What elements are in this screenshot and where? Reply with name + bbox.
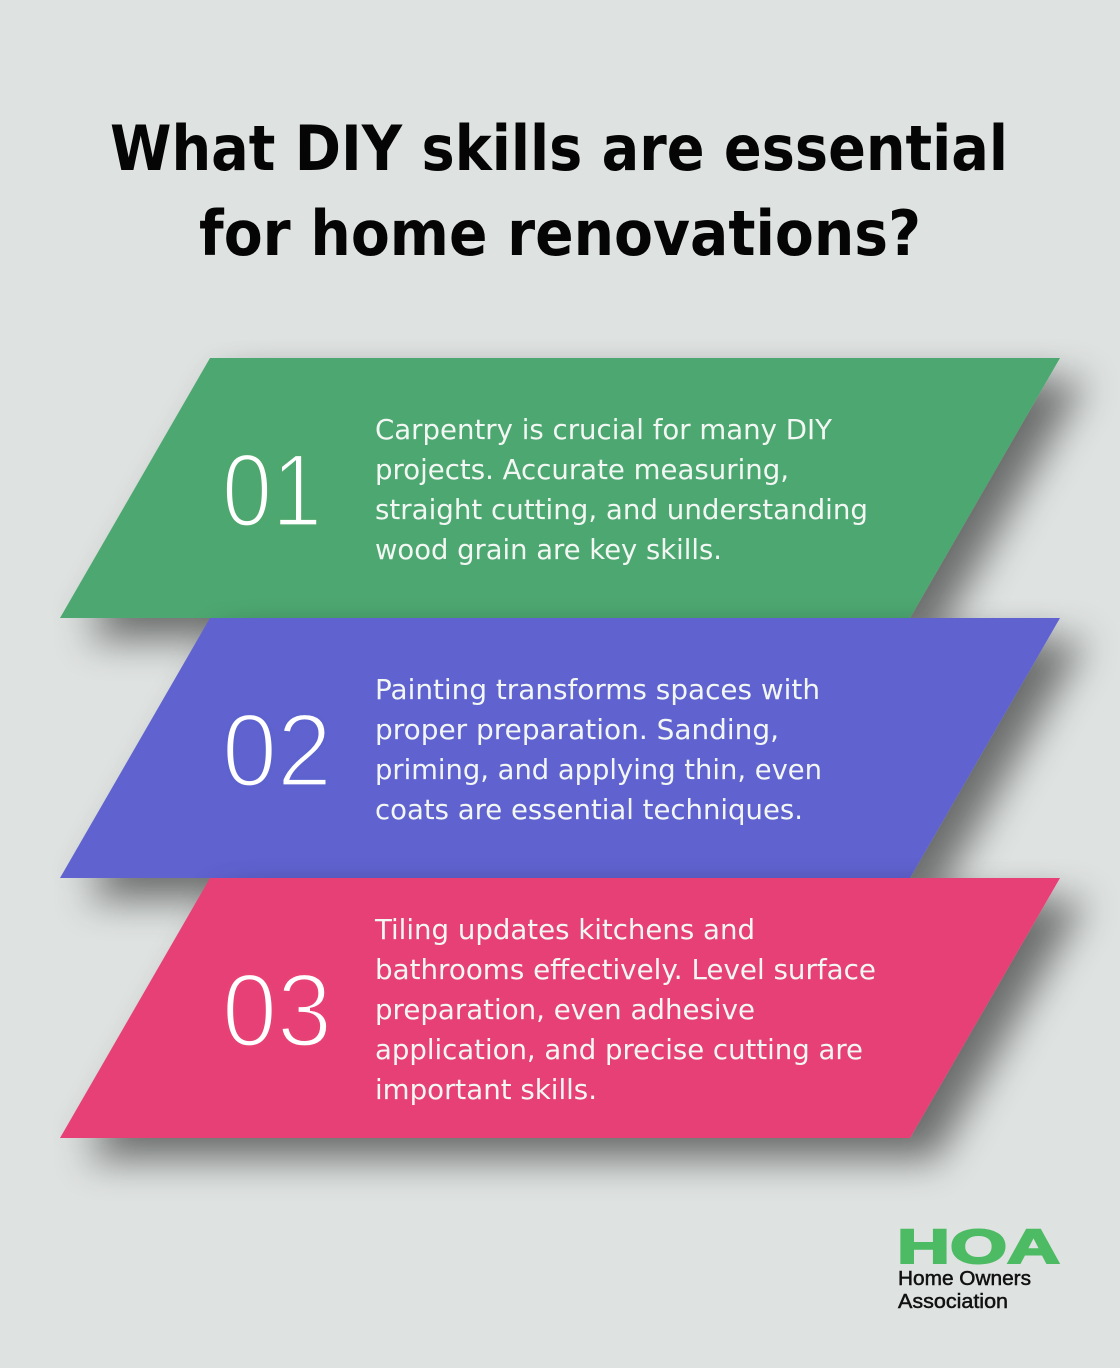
text: tiling description bbox=[374, 914, 876, 1106]
text: carpentry description: wood grain are key skills. bbox=[375, 534, 722, 566]
text: carpentry description bbox=[375, 414, 868, 566]
text: painting description bbox=[375, 674, 822, 826]
text: tiling description: Tiling updates kitchens and bbox=[374, 914, 755, 946]
text: carpentry description: straight cutting, and understanding bbox=[375, 494, 868, 526]
title: for home renovations? bbox=[199, 197, 921, 270]
text: tiling description: preparation, even adhesive bbox=[375, 994, 755, 1026]
title: What DIY skills are essential bbox=[110, 112, 1008, 185]
text: painting description: Painting transforms spaces with bbox=[375, 674, 820, 706]
title bbox=[110, 112, 1008, 270]
panel: step 01 carpentry bbox=[60, 358, 1060, 618]
number 01: 01 bbox=[222, 433, 322, 549]
green parallelogram bbox=[60, 358, 1060, 618]
text: carpentry description: Carpentry is crucial for many DIY bbox=[375, 414, 832, 446]
number 02: 02 bbox=[222, 693, 332, 809]
text: tiling description: application, and precise cutting are bbox=[375, 1034, 863, 1066]
pink parallelogram bbox=[60, 878, 1060, 1138]
text: tiling description: bathrooms effectively. Level surface bbox=[375, 954, 876, 986]
blue parallelogram bbox=[60, 618, 1060, 878]
logo wordmark: Home Owners bbox=[898, 1268, 1031, 1290]
panel: step 03 tiling bbox=[60, 878, 1060, 1138]
text: painting description: coats are essential techniques. bbox=[375, 794, 803, 826]
text: carpentry description: projects. Accurate measuring, bbox=[375, 454, 789, 486]
logo wordmark: Association bbox=[898, 1291, 1008, 1313]
panel: step 02 painting bbox=[60, 618, 1060, 878]
text: painting description: proper preparation. Sanding, bbox=[375, 714, 779, 746]
logo wordmark bbox=[898, 1268, 1031, 1313]
text: painting description: priming, and applying thin, even bbox=[375, 754, 822, 786]
text: tiling description: important skills. bbox=[375, 1074, 597, 1106]
logo mark: HOA letters: HOA bbox=[897, 1221, 1060, 1274]
number 03: 03 bbox=[222, 953, 332, 1069]
logo: HOA Home Owners Association bbox=[897, 1221, 1060, 1313]
